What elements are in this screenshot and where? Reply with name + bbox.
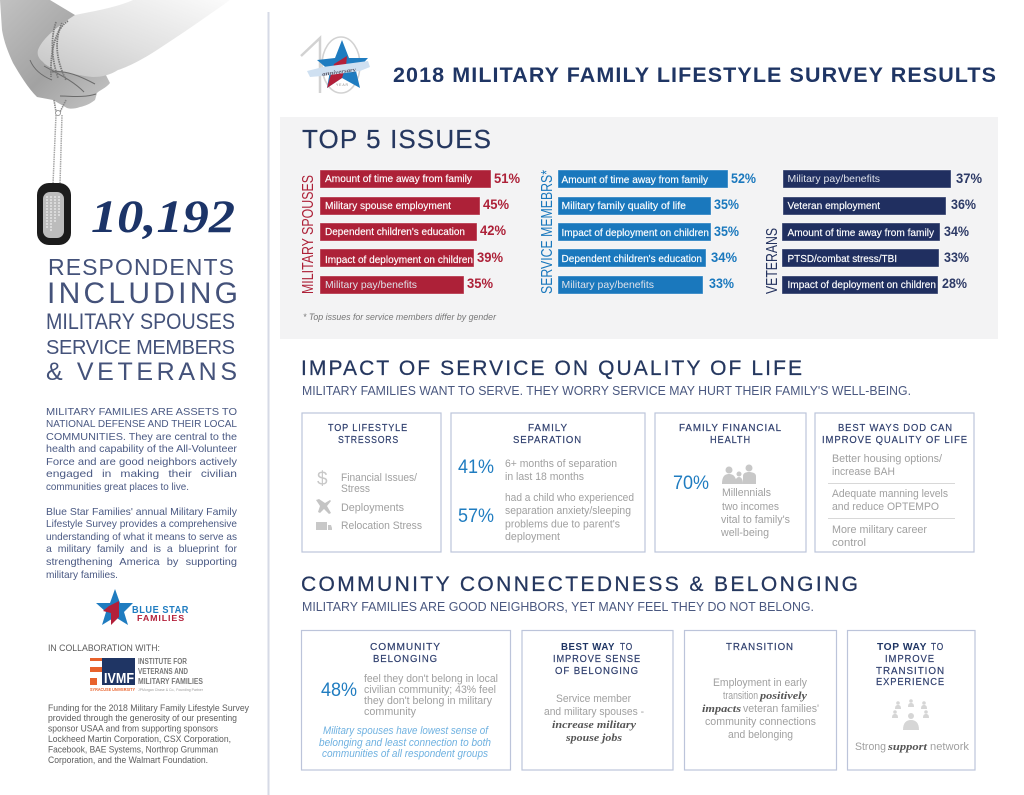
panel: best ways DoD can improve: [815, 413, 974, 552]
chart: veterans: Military pay/benefits: [788, 173, 880, 185]
panel: best way to improve belonging: BEST WAY: [561, 641, 615, 653]
chart: service members: SERVICE MEMEBRS*: [539, 170, 556, 294]
chart: military spouses: Military spouse employment: [325, 200, 451, 212]
chart: veterans: Amount of time away from family: [788, 227, 935, 239]
panel: top way to improve transition: support: [887, 741, 928, 753]
panel: top lifestyle stressors: [302, 413, 441, 552]
respondents headline: [46, 254, 238, 386]
panel: family financial health: [655, 413, 806, 552]
panel: family separation: had a child who experienced: [505, 492, 634, 504]
intro paragraph: NATIONAL DEFENSE AND THEIR LOCAL: [46, 418, 237, 430]
funding note: Lockheed Martin Corporation, CSX Corporation,: [48, 734, 231, 745]
panel: best way to improve belonging: [522, 630, 673, 770]
funding note: sponsor USAA and from supporting sponsors: [48, 724, 218, 734]
icon: family: [722, 464, 756, 484]
panel: best way to improve belonging: and military spouses -: [544, 706, 644, 718]
intro paragraph: communities great places to live.: [46, 481, 189, 493]
panel: best ways DoD can improve: Adequate manning levels: [832, 488, 948, 500]
panel: best way to improve belonging: IMPROVE SENSE: [553, 653, 641, 665]
chart: veterans: [764, 170, 982, 294]
respondents headline: MILITARY SPOUSES: [46, 309, 235, 334]
subheading: impact of service: MILITARY FAMILIES WANT TO SERVE. THEY WORRY SERVICE MAY HURT THEIR FAMILY'S WELL-BEING.: [302, 384, 911, 398]
panel: top way to improve transition: IMPROVE: [885, 653, 935, 665]
panel: transition: impacts: [702, 703, 741, 715]
panel: community belonging: COMMUNITY: [370, 641, 441, 653]
panel: community belonging: civilian community; 43% feel: [364, 684, 496, 696]
intro paragraph: [46, 406, 238, 493]
chart: service members: Dependent children's education: [562, 253, 702, 265]
panel: transition: and belonging: [728, 729, 793, 741]
panel: family financial health: two incomes: [722, 501, 779, 513]
funding note: [48, 703, 249, 766]
panel: top way to improve transition: Strong: [855, 741, 886, 753]
respondents headline: & VETERANS: [46, 358, 237, 386]
panel: best ways DoD can improve: and reduce OPTEMPO: [832, 501, 939, 513]
footnote: * Top issues for service members differ by gender: [303, 312, 497, 323]
panel: family separation: FAMILY: [528, 422, 568, 434]
panel: top lifestyle stressors: Financial Issues/: [341, 472, 418, 484]
chart: service members: 52%: [731, 171, 756, 186]
panel: family separation: in last 18 months: [505, 471, 584, 483]
panel: best way to improve belonging: OF BELONGING: [555, 665, 639, 677]
panel: transition: community connections: [705, 716, 816, 728]
panel: community belonging: Military spouses have lowest sense of: [323, 725, 489, 737]
chart: military spouses: Impact of deployment on children: [325, 254, 473, 266]
chart: service members: 33%: [709, 276, 734, 291]
panel: family financial health: vital to family's: [721, 514, 790, 526]
panel: transition: positively: [759, 690, 807, 702]
intro paragraph: COMMUNITIES. They are central to the: [46, 431, 237, 443]
panel: community belonging: BELONGING: [373, 653, 438, 665]
panel: community belonging: belonging and least connection to both: [319, 737, 491, 749]
chart: military spouses: MILITARY SPOUSES: [300, 175, 317, 294]
survey description paragraph: a military family and is a blueprint for: [46, 543, 237, 555]
chart: veterans: 37%: [956, 171, 982, 186]
panel: top way to improve transition: TOP WAY: [877, 641, 927, 653]
chart: military spouses: 42%: [480, 223, 506, 238]
chart: service members: 34%: [711, 250, 737, 265]
chart: military spouses: Dependent children's education: [325, 226, 465, 238]
panel: best ways DoD can improve: increase BAH: [832, 466, 895, 478]
survey description paragraph: understanding of what it means to serve as: [46, 531, 237, 543]
logo: IVMF: IVMF: [104, 670, 134, 687]
panel: community belonging: they don't belong in military: [364, 695, 492, 707]
panel: community belonging: communities of all respondent groups: [322, 748, 488, 760]
panel: top 5 issues: [280, 117, 998, 339]
respondents count: 10,192: [91, 191, 235, 243]
panel: best ways DoD can improve: IMPROVE QUALITY OF LIFE: [822, 434, 968, 446]
icon: plane: [316, 499, 331, 514]
panel: best ways DoD can improve: control: [832, 537, 866, 549]
logo: IVMF: JPMorgan Chase & Co., Founding Partner: [138, 687, 204, 692]
chart: veterans: 36%: [951, 197, 976, 212]
panel: family separation: deployment: [505, 531, 560, 543]
logo: IVMF: SYRACUSE UNIVERSITY: [90, 687, 135, 692]
panel: top way to improve transition: EXPERIENCE: [876, 676, 945, 688]
panel: community belonging: [302, 630, 510, 770]
heading: community connectedness: COMMUNITY CONNECTEDNESS & BELONGING: [301, 573, 858, 596]
respondents headline: SERVICE MEMBERS: [46, 337, 235, 359]
panel: family financial health: 70%: [673, 473, 709, 494]
chart: service members: Military family quality of life: [562, 200, 686, 212]
panel: transition: Employment in early: [713, 677, 807, 689]
chart: veterans: 34%: [944, 224, 969, 239]
panel: family financial health: Millennials: [722, 487, 771, 499]
respondents headline: INCLUDING: [47, 277, 238, 310]
panel: community belonging: feel they don't belong in local: [364, 673, 498, 685]
survey description paragraph: Lifestyle Survey provides a comprehensive: [46, 518, 237, 530]
panel: top lifestyle stressors: TOP LIFESTYLE: [328, 422, 408, 434]
logo: Blue Star Families: FAMILIES: [137, 614, 185, 623]
chart: military spouses: 39%: [477, 250, 503, 265]
survey description paragraph: strengthening America by supporting: [46, 556, 237, 568]
panel: top way to improve transition: [848, 630, 975, 770]
chart: military spouses: 35%: [467, 276, 493, 291]
panel: best way to improve belonging: increase military: [552, 719, 636, 731]
photo: clasped hands holding dog tag: [0, 0, 230, 245]
panel: family separation: 57%: [458, 506, 494, 527]
collaboration label: IN COLLABORATION WITH:: [48, 643, 160, 654]
subheading: community connectedness: MILITARY FAMILIES ARE GOOD NEIGHBORS, YET MANY FEEL THEY DO NOT BELONG.: [302, 600, 814, 614]
survey description paragraph: military families.: [46, 569, 118, 581]
panel: community belonging: 48%: [321, 680, 357, 701]
chart: service members: Military pay/benefits: [562, 279, 654, 291]
panel: family separation: SEPARATION: [513, 434, 582, 446]
chart: service members: Amount of time away from family: [562, 174, 709, 186]
survey description paragraph: Blue Star Families' annual Military Family: [46, 506, 238, 518]
chart: veterans: Veteran employment: [788, 200, 880, 212]
intro paragraph: Force and are good neighbors actively: [46, 456, 238, 468]
panel: top lifestyle stressors: Deployments: [341, 502, 404, 514]
title: 2018 MILITARY FAMILY LIFESTYLE SURVEY RESULTS: [393, 63, 996, 87]
funding note: provided through the generosity of our presenting: [48, 713, 237, 724]
icon: truck: [316, 522, 332, 530]
panel: family financial health: HEALTH: [710, 434, 751, 446]
panel: family financial health: well-being: [720, 527, 769, 539]
panel: family separation: problems due to parent's: [505, 518, 620, 530]
panel: family separation: [451, 413, 645, 552]
icon: support network: [892, 699, 929, 730]
funding note: Corporation, and the Walmart Foundation.: [48, 755, 208, 766]
panel: best ways DoD can improve: More military career: [832, 524, 927, 536]
logo: 10 year anniversary: anniversary: [322, 67, 357, 78]
chart: military spouses: [300, 170, 520, 294]
panel: best ways DoD can improve: Better housing options/: [832, 453, 943, 465]
logo: IVMF: INSTITUTE FOR: [138, 657, 187, 666]
chart: military spouses: Amount of time away from family: [325, 173, 473, 185]
intro paragraph: health and capability of the All-Volunteer: [46, 443, 238, 455]
panel: best way to improve belonging: TO: [620, 641, 633, 653]
panel: top way to improve transition: network: [930, 741, 969, 753]
panel: family separation: separation anxiety/sleeping: [505, 505, 631, 517]
chart: military spouses: 45%: [483, 197, 509, 212]
column divider: [268, 12, 270, 795]
logo: Blue Star Families: BLUE STAR: [132, 605, 189, 616]
panel: family financial health: FAMILY FINANCIAL: [679, 422, 782, 434]
chart: service members: [539, 170, 756, 294]
heading: top 5 issues: TOP 5 ISSUES: [302, 124, 491, 154]
panel: top way to improve transition: TO: [931, 641, 944, 653]
logo: IVMF: MILITARY FAMILIES: [138, 677, 204, 686]
logo: 10 year anniversary: YEAR: [336, 83, 348, 87]
logo: IVMF: [90, 657, 204, 692]
intro paragraph: engaged in making their civilian: [46, 468, 237, 480]
funding note: Funding for the 2018 Military Family Lifestyle Survey: [48, 703, 249, 714]
panel: best way to improve belonging: spouse jobs: [565, 732, 622, 744]
chart: service members: 35%: [714, 224, 739, 239]
panel: top lifestyle stressors: Stress: [341, 483, 370, 495]
panel: best ways DoD can improve: BEST WAYS DOD CAN: [838, 422, 953, 434]
logo: 10 year anniversary: [301, 37, 370, 93]
panel: transition: [684, 630, 836, 770]
chart: veterans: Impact of deployment on children: [788, 279, 936, 291]
panel: family separation: 41%: [458, 457, 494, 478]
panel: transition: veteran families': [743, 703, 819, 715]
panel: top way to improve transition: TRANSITION: [876, 665, 945, 677]
intro paragraph: MILITARY FAMILIES ARE ASSETS TO: [46, 406, 237, 418]
chart: service members: 35%: [714, 197, 739, 212]
panel: family separation: 6+ months of separation: [505, 458, 617, 470]
logo: IVMF: VETERANS AND: [138, 667, 188, 676]
chart: veterans: 28%: [942, 276, 967, 291]
chart: military spouses: Military pay/benefits: [325, 279, 417, 291]
panel: transition: transition: [723, 690, 758, 702]
panel: top lifestyle stressors: Relocation Stress: [341, 520, 422, 532]
chart: military spouses: 51%: [494, 171, 520, 186]
heading: impact of service: IMPACT OF SERVICE ON QUALITY OF LIFE: [301, 357, 802, 380]
respondents headline: RESPONDENTS: [48, 254, 234, 280]
panel: transition: TRANSITION: [726, 641, 794, 653]
survey description paragraph: [46, 506, 238, 581]
panel: community belonging: community: [364, 706, 416, 718]
panel: best way to improve belonging: Service member: [556, 693, 631, 705]
icon: dollar: $: [317, 469, 328, 490]
panel: top lifestyle stressors: STRESSORS: [338, 434, 399, 446]
chart: veterans: 33%: [944, 250, 969, 265]
chart: veterans: PTSD/combat stress/TBI: [788, 253, 897, 265]
chart: service members: Impact of deployment on children: [562, 227, 709, 239]
funding note: Facebook, BAE Systems, Northrop Grumman: [48, 744, 218, 756]
chart: veterans: VETERANS: [764, 228, 781, 294]
logo: Blue Star Families: [96, 589, 189, 625]
